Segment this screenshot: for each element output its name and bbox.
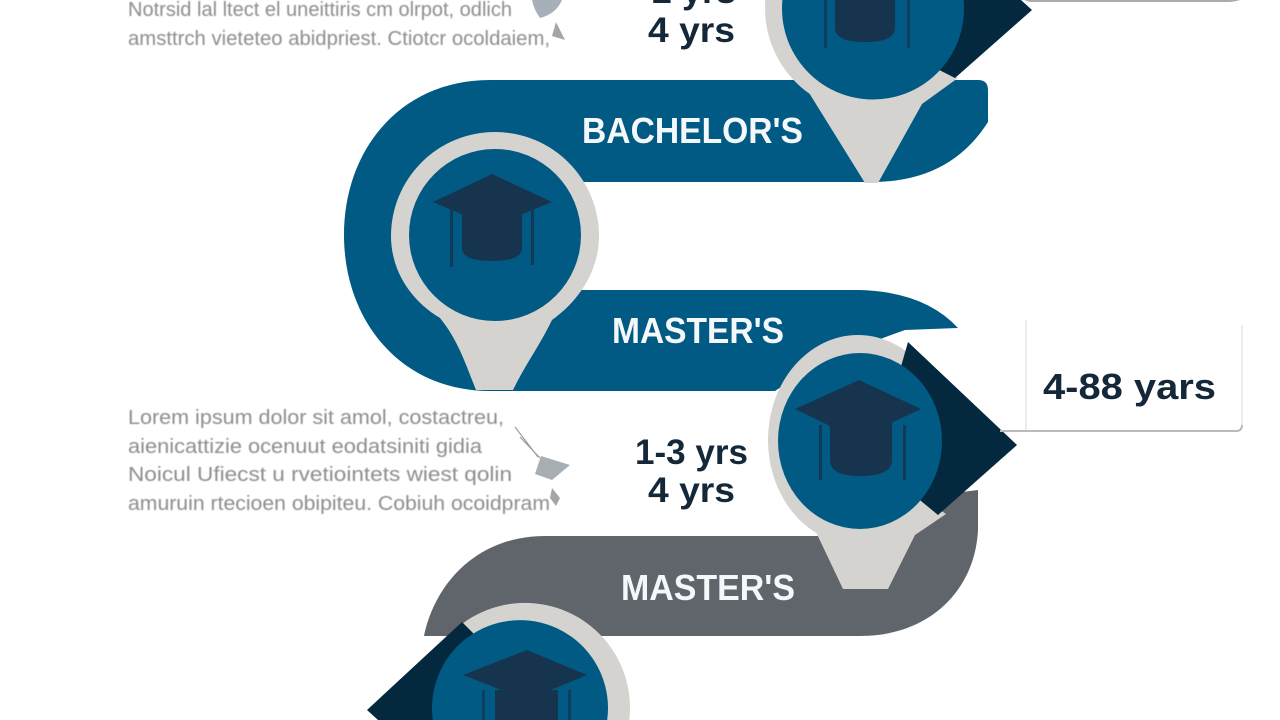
icon: graduation cap bottom [463,650,587,720]
icon: upper pointer [532,0,565,40]
label: Bachelor's: BACHELOR'S [582,110,803,151]
ribbon: grey curve [424,490,978,636]
years: lower duration [635,433,748,510]
text block: lower description: amuruin rtecioen obipiteu. Cobiuh ocoidpram [128,493,550,515]
years: lower duration: 4 yrs [648,471,735,510]
pin: right graduation marker [768,335,1017,589]
pin: left graduation marker [391,132,599,390]
panel: top value card edge [1024,0,1240,2]
ribbon: blue S-curve [344,80,988,391]
label: Master's grey: MASTER'S [621,567,795,608]
text block: lower description: Noicul Ufiecst u rvetiointets wiest qolin [128,464,512,486]
icon: graduation cap left [433,174,552,267]
icon: lower pointer [515,427,570,506]
value: 4-88 years: 4-88 yars [1043,366,1216,407]
text block: lower description: aienicattizie ocenuut eodatsiniti gidia [128,436,483,458]
pin: bottom graduation marker [367,603,630,720]
label: Master's blue: MASTER'S [612,310,784,351]
panel: value card [1000,320,1242,431]
text block: lower description: Lorem ipsum dolor sit amol, costactreu, [128,407,504,429]
text block: lower description [128,407,550,515]
text block: upper description: amsttrch vieteteo abidpriest. Ctiotcr ocoldaiem, [128,28,550,50]
years: lower duration: 1-3 yrs [635,433,748,472]
icon: graduation cap right [795,380,921,480]
years: upper duration: 4 yrs [648,11,735,50]
text block: upper description [128,0,550,50]
pin: top graduation marker [765,0,1032,183]
